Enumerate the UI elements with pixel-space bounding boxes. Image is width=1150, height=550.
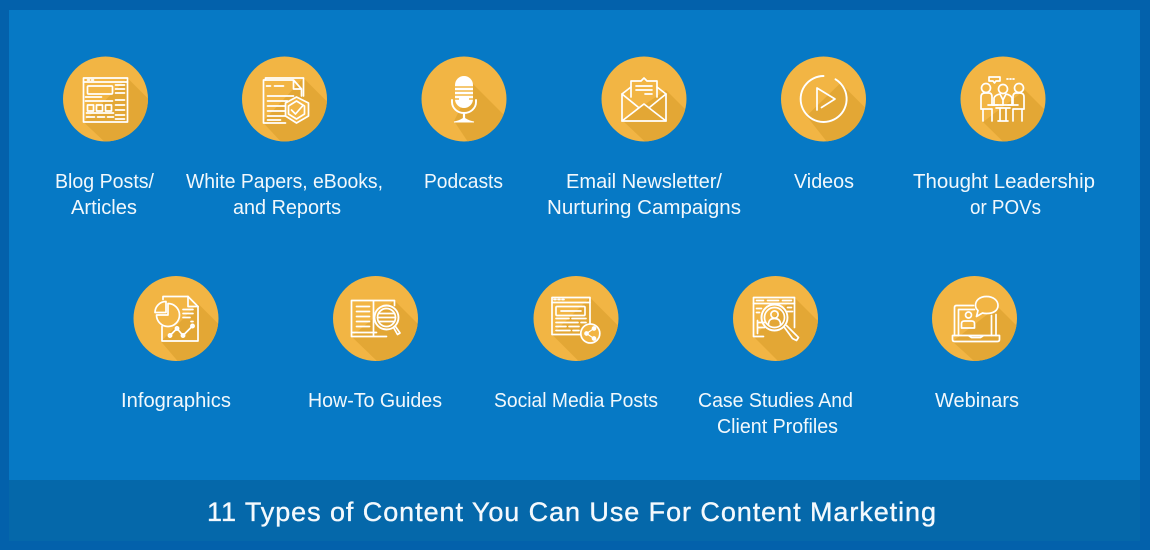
label: Nurturing Campaigns <box>547 197 741 219</box>
footer banner <box>9 480 1140 541</box>
icon: open book with magnifier <box>333 276 418 361</box>
icon: post window with share badge <box>534 276 618 361</box>
label: Articles <box>71 197 137 219</box>
label: Podcasts <box>424 171 503 193</box>
item: White Papers <box>186 56 383 219</box>
icon: laptop with speech bubble <box>932 276 1017 361</box>
icon: microphone <box>422 56 506 142</box>
icon: play button <box>781 56 866 142</box>
item: Videos <box>781 56 866 188</box>
label: How-To Guides <box>308 390 442 412</box>
label: Case Studies And <box>698 390 853 412</box>
item: Webinars <box>932 276 1018 407</box>
label: Thought Leadership <box>913 171 1095 193</box>
label: Client Profiles <box>717 416 838 438</box>
item: Infographics <box>122 276 230 411</box>
item: Blog Posts/Articles <box>56 56 154 214</box>
label: and Reports <box>233 197 341 219</box>
label: Email Newsletter/ <box>566 171 722 193</box>
item: Social Media Posts <box>494 276 658 412</box>
label: Blog Posts/ <box>55 171 154 193</box>
icon: newspaper page <box>63 56 148 142</box>
item: How-To Guides <box>308 276 446 412</box>
label: Videos <box>794 171 854 193</box>
item: Podcasts <box>422 56 506 188</box>
label: Webinars <box>935 390 1019 412</box>
title: 11 Types of Content You Can Use For Content Marketing <box>207 497 936 527</box>
icon: people at a table <box>960 56 1046 142</box>
icon: browser with magnifier over a person <box>733 276 818 361</box>
label: Infographics <box>121 390 231 412</box>
label: or POVs <box>970 197 1041 219</box>
item: Thought Leadership <box>913 56 1095 219</box>
item: Case Studies <box>698 276 853 438</box>
label: White Papers, eBooks, <box>186 171 383 193</box>
icon: open envelope <box>602 56 686 142</box>
label: Social Media Posts <box>494 390 658 412</box>
icon: document with shield <box>242 56 327 142</box>
icon: report with pie and line chart <box>134 276 218 361</box>
item: Email Newsletter <box>547 56 741 219</box>
